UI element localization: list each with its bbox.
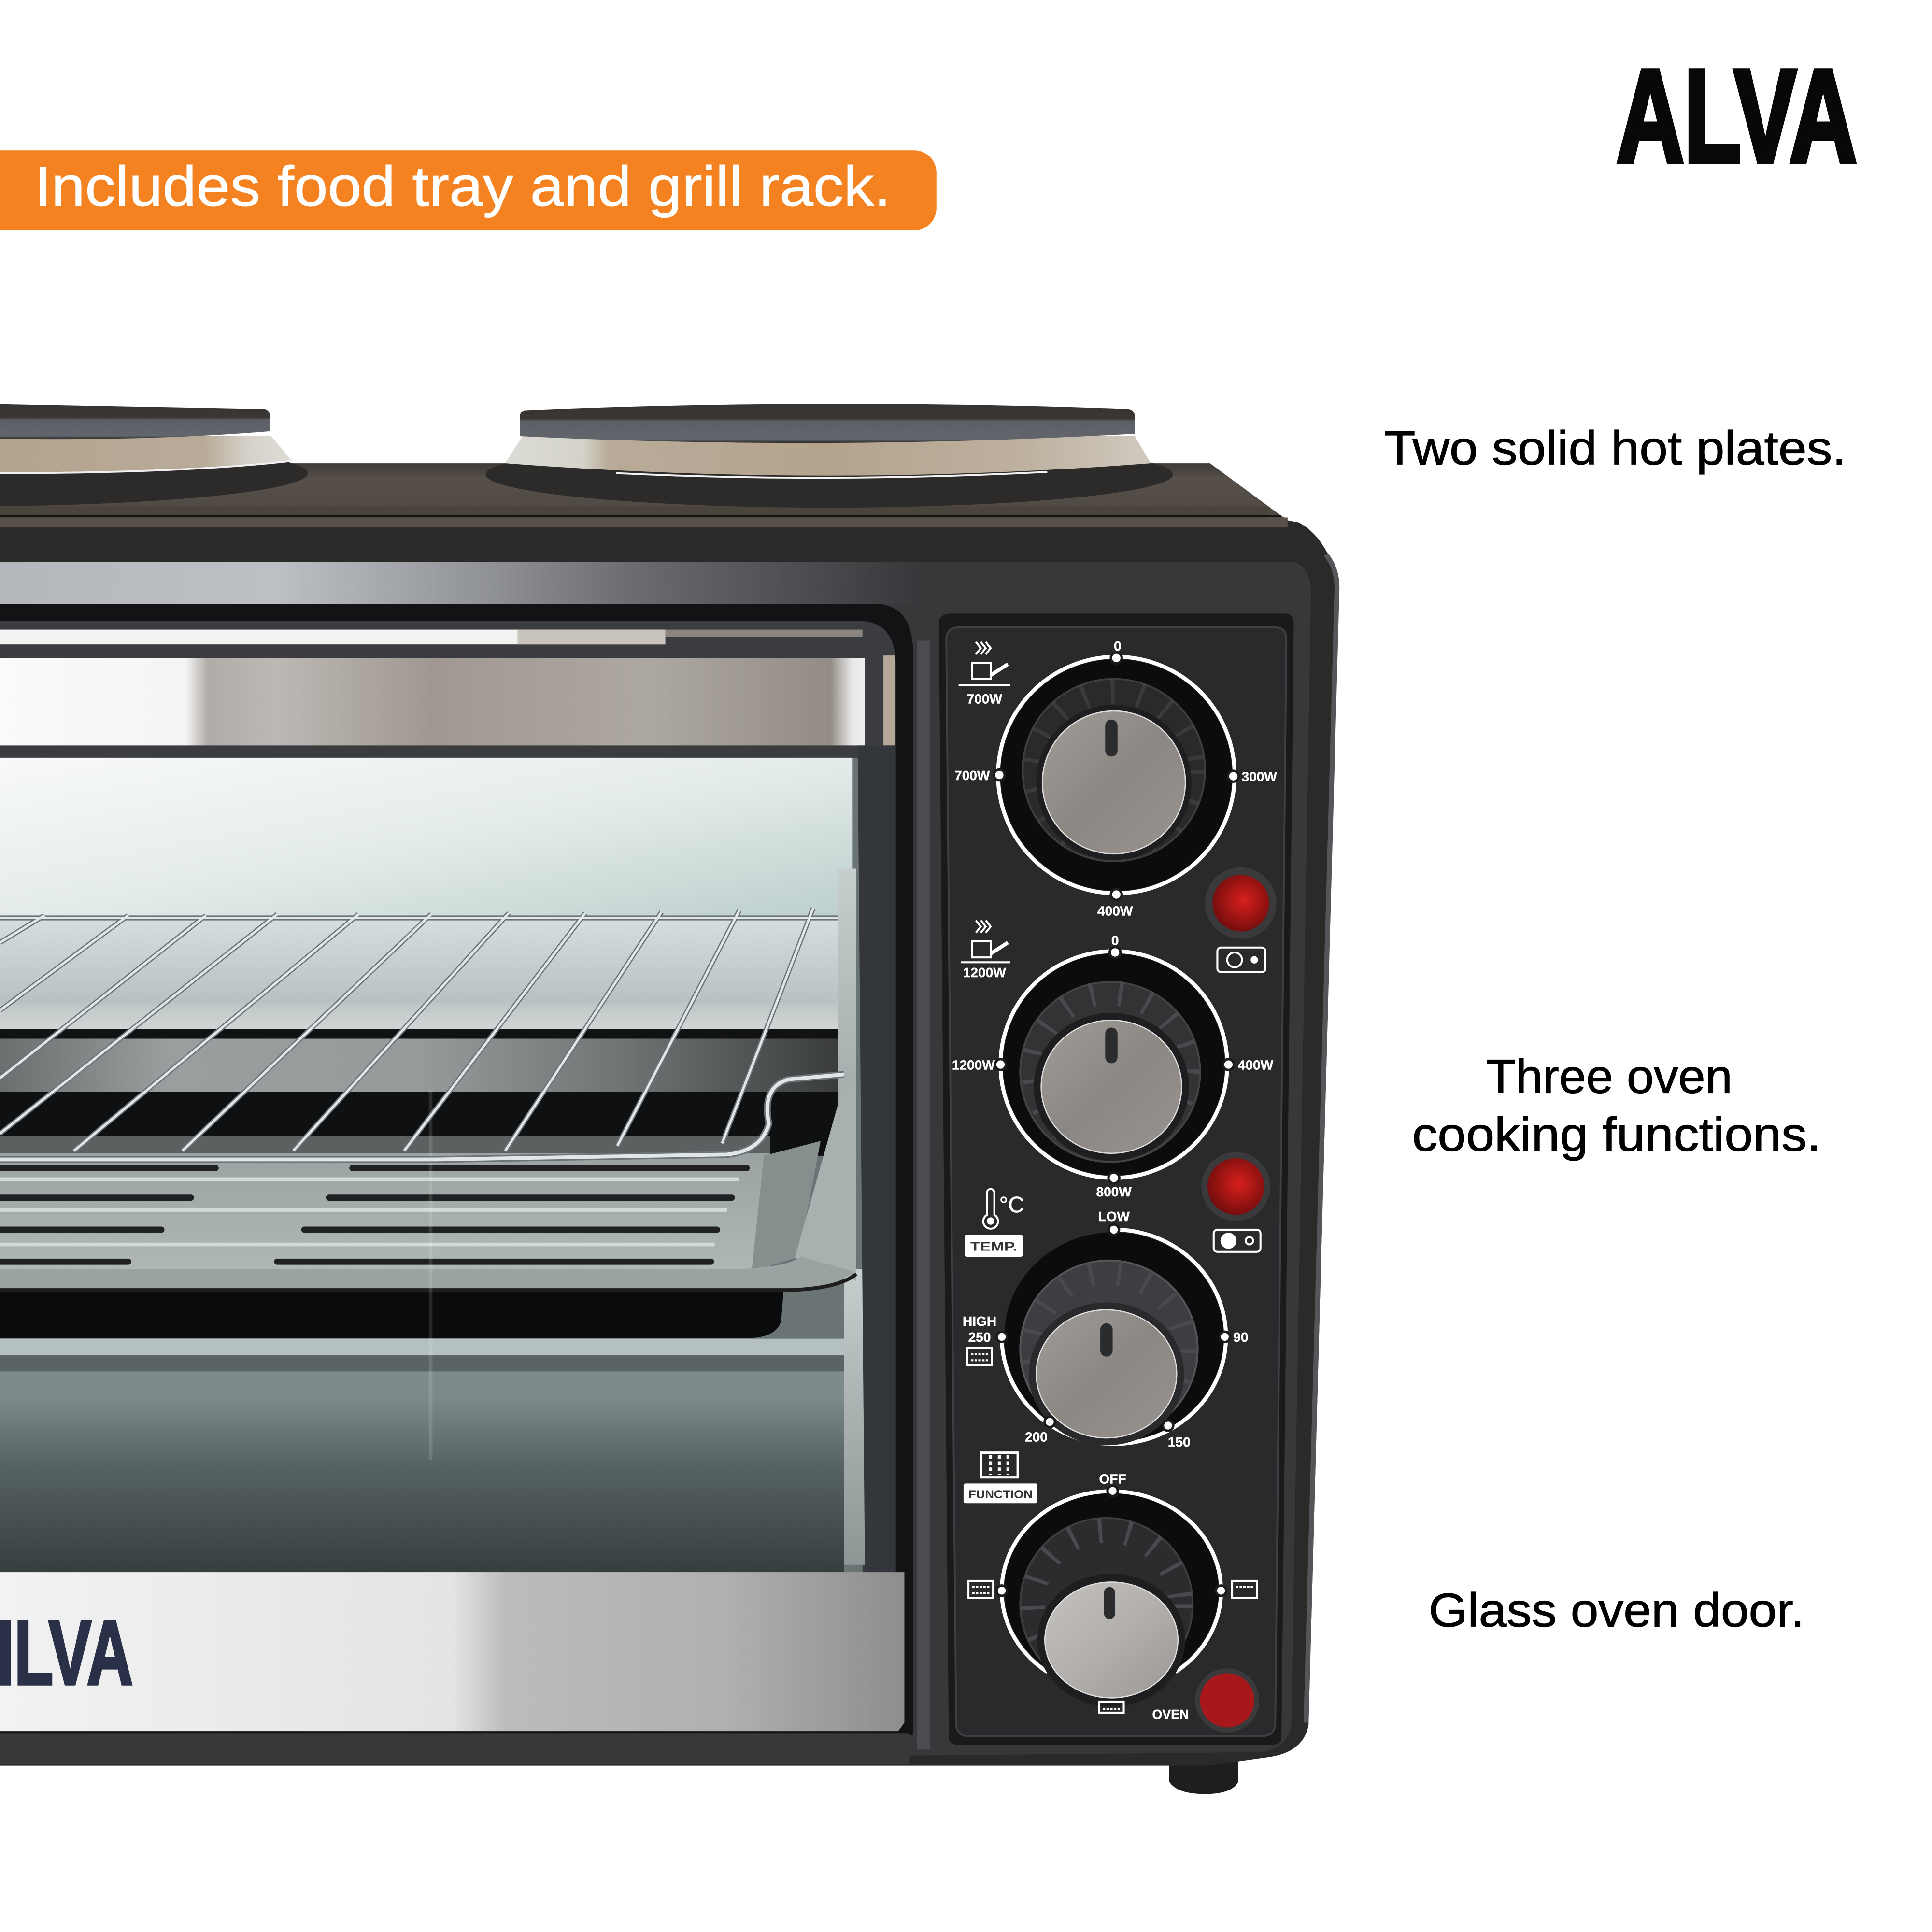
oven top surface xyxy=(0,463,1299,527)
hot plate: left xyxy=(0,404,308,506)
icon: function xyxy=(981,1453,1018,1477)
dial 3: temperature: 90 xyxy=(1233,1330,1248,1345)
feature text: cooking functions: Three oven xyxy=(1486,1050,1733,1103)
dial 1: 700W hot plate: 400W xyxy=(1097,903,1133,918)
indicator light 2 xyxy=(1201,1152,1270,1221)
right edge highlight xyxy=(1306,554,1337,1722)
icon: function left xyxy=(968,1581,993,1598)
glass upper reflection xyxy=(0,758,852,918)
dial 1: 700W hot plate xyxy=(954,639,1277,918)
label: function xyxy=(964,1483,1037,1503)
dial 3: temperature xyxy=(963,1209,1248,1449)
label: temp xyxy=(965,1235,1023,1257)
gap strip xyxy=(917,641,930,1749)
glass reflection streak xyxy=(429,1091,432,1460)
dial 3: temperature: 150 xyxy=(1168,1435,1191,1449)
label: function: FUNCTION xyxy=(968,1488,1033,1501)
feature text: cooking functions xyxy=(1412,1050,1821,1161)
door brand: ALVA: ILVA xyxy=(0,1602,133,1704)
dial 2: 1200W hot plate: 800W xyxy=(1096,1184,1132,1199)
oven body xyxy=(0,517,1339,1766)
door frame xyxy=(0,621,896,1731)
icon: thermometer xyxy=(983,1189,1024,1229)
door handle xyxy=(0,658,865,745)
rear black zone xyxy=(0,1092,841,1156)
icon: front plate selector xyxy=(1214,1230,1261,1252)
dial 3: temperature: HIGH xyxy=(963,1314,996,1329)
stainless top trim xyxy=(0,562,918,604)
door right frame xyxy=(858,745,896,1574)
icon: top and bottom heat, temp xyxy=(967,1348,992,1365)
dial 1: 700W hot plate: 300W xyxy=(1242,769,1277,784)
oven floor xyxy=(0,1338,844,1572)
icon: function right xyxy=(1232,1581,1257,1598)
panel groove xyxy=(939,613,1294,1745)
rear tray side xyxy=(0,1039,841,1092)
dial 3: temperature: 200 xyxy=(1025,1430,1048,1445)
control panel xyxy=(939,613,1294,1745)
top lip lines xyxy=(0,506,1288,527)
indicator light 3 xyxy=(1195,1668,1259,1733)
dial 1: 700W hot plate: 700W xyxy=(967,692,1002,707)
baking tray xyxy=(0,1084,856,1290)
dial 2: 1200W hot plate xyxy=(952,933,1274,1199)
icon: function bottom xyxy=(1099,1702,1124,1713)
dial 3: temperature: 250 xyxy=(968,1330,991,1345)
dial 4: function xyxy=(998,1471,1225,1722)
door surround gap xyxy=(0,604,913,1735)
hot plate: right xyxy=(485,404,1173,508)
dial 1: 700W hot plate: 700W xyxy=(954,768,990,783)
door lower band xyxy=(0,1733,909,1764)
panel plate xyxy=(946,627,1286,1736)
rear black gap xyxy=(0,1029,841,1039)
dial 2: 1200W hot plate: 400W xyxy=(1238,1057,1274,1072)
dial 2: 1200W hot plate: 1200W xyxy=(963,965,1006,980)
dial 4: function: OFF xyxy=(1099,1471,1126,1486)
side wall xyxy=(838,868,856,1275)
banner: food tray and grill rack xyxy=(0,150,937,230)
banner: food tray and grill rack: Includes food tray and grill rack. xyxy=(34,155,891,218)
frame tan edge xyxy=(883,655,895,745)
feature text: hot plates: Two solid hot plates. xyxy=(1384,422,1847,475)
door stainless base plate xyxy=(0,1572,904,1731)
dial 2: 1200W hot plate: 1200W xyxy=(952,1057,995,1072)
feature text: cooking functions: cooking functions. xyxy=(1412,1108,1821,1161)
indicator light 1 xyxy=(1205,867,1277,939)
dial 1: 700W hot plate: 0 xyxy=(1114,639,1122,653)
grill rack xyxy=(0,908,844,1160)
side wall lower xyxy=(844,1269,865,1565)
dial 3: temperature: LOW xyxy=(1098,1209,1130,1224)
icon: rear plate selector xyxy=(1217,948,1265,972)
oven rear wall xyxy=(0,918,841,1029)
feature text: glass door: Glass oven door. xyxy=(1429,1583,1804,1636)
dial 4: function: OVEN xyxy=(1152,1707,1189,1722)
icon: hot plate 700W xyxy=(959,642,1010,685)
oven front face xyxy=(0,562,1311,1764)
oven foot xyxy=(1169,1760,1238,1794)
under-tray shadow xyxy=(0,1289,783,1338)
icon: hot plate 1200W xyxy=(961,921,1010,962)
door top bright strip xyxy=(0,630,863,644)
oven window xyxy=(0,758,865,1574)
icon: thermometer: °C xyxy=(999,1192,1024,1217)
oven xyxy=(0,404,1339,1794)
dial 2: 1200W hot plate: 0 xyxy=(1111,933,1119,948)
label: temp: TEMP. xyxy=(970,1240,1017,1253)
